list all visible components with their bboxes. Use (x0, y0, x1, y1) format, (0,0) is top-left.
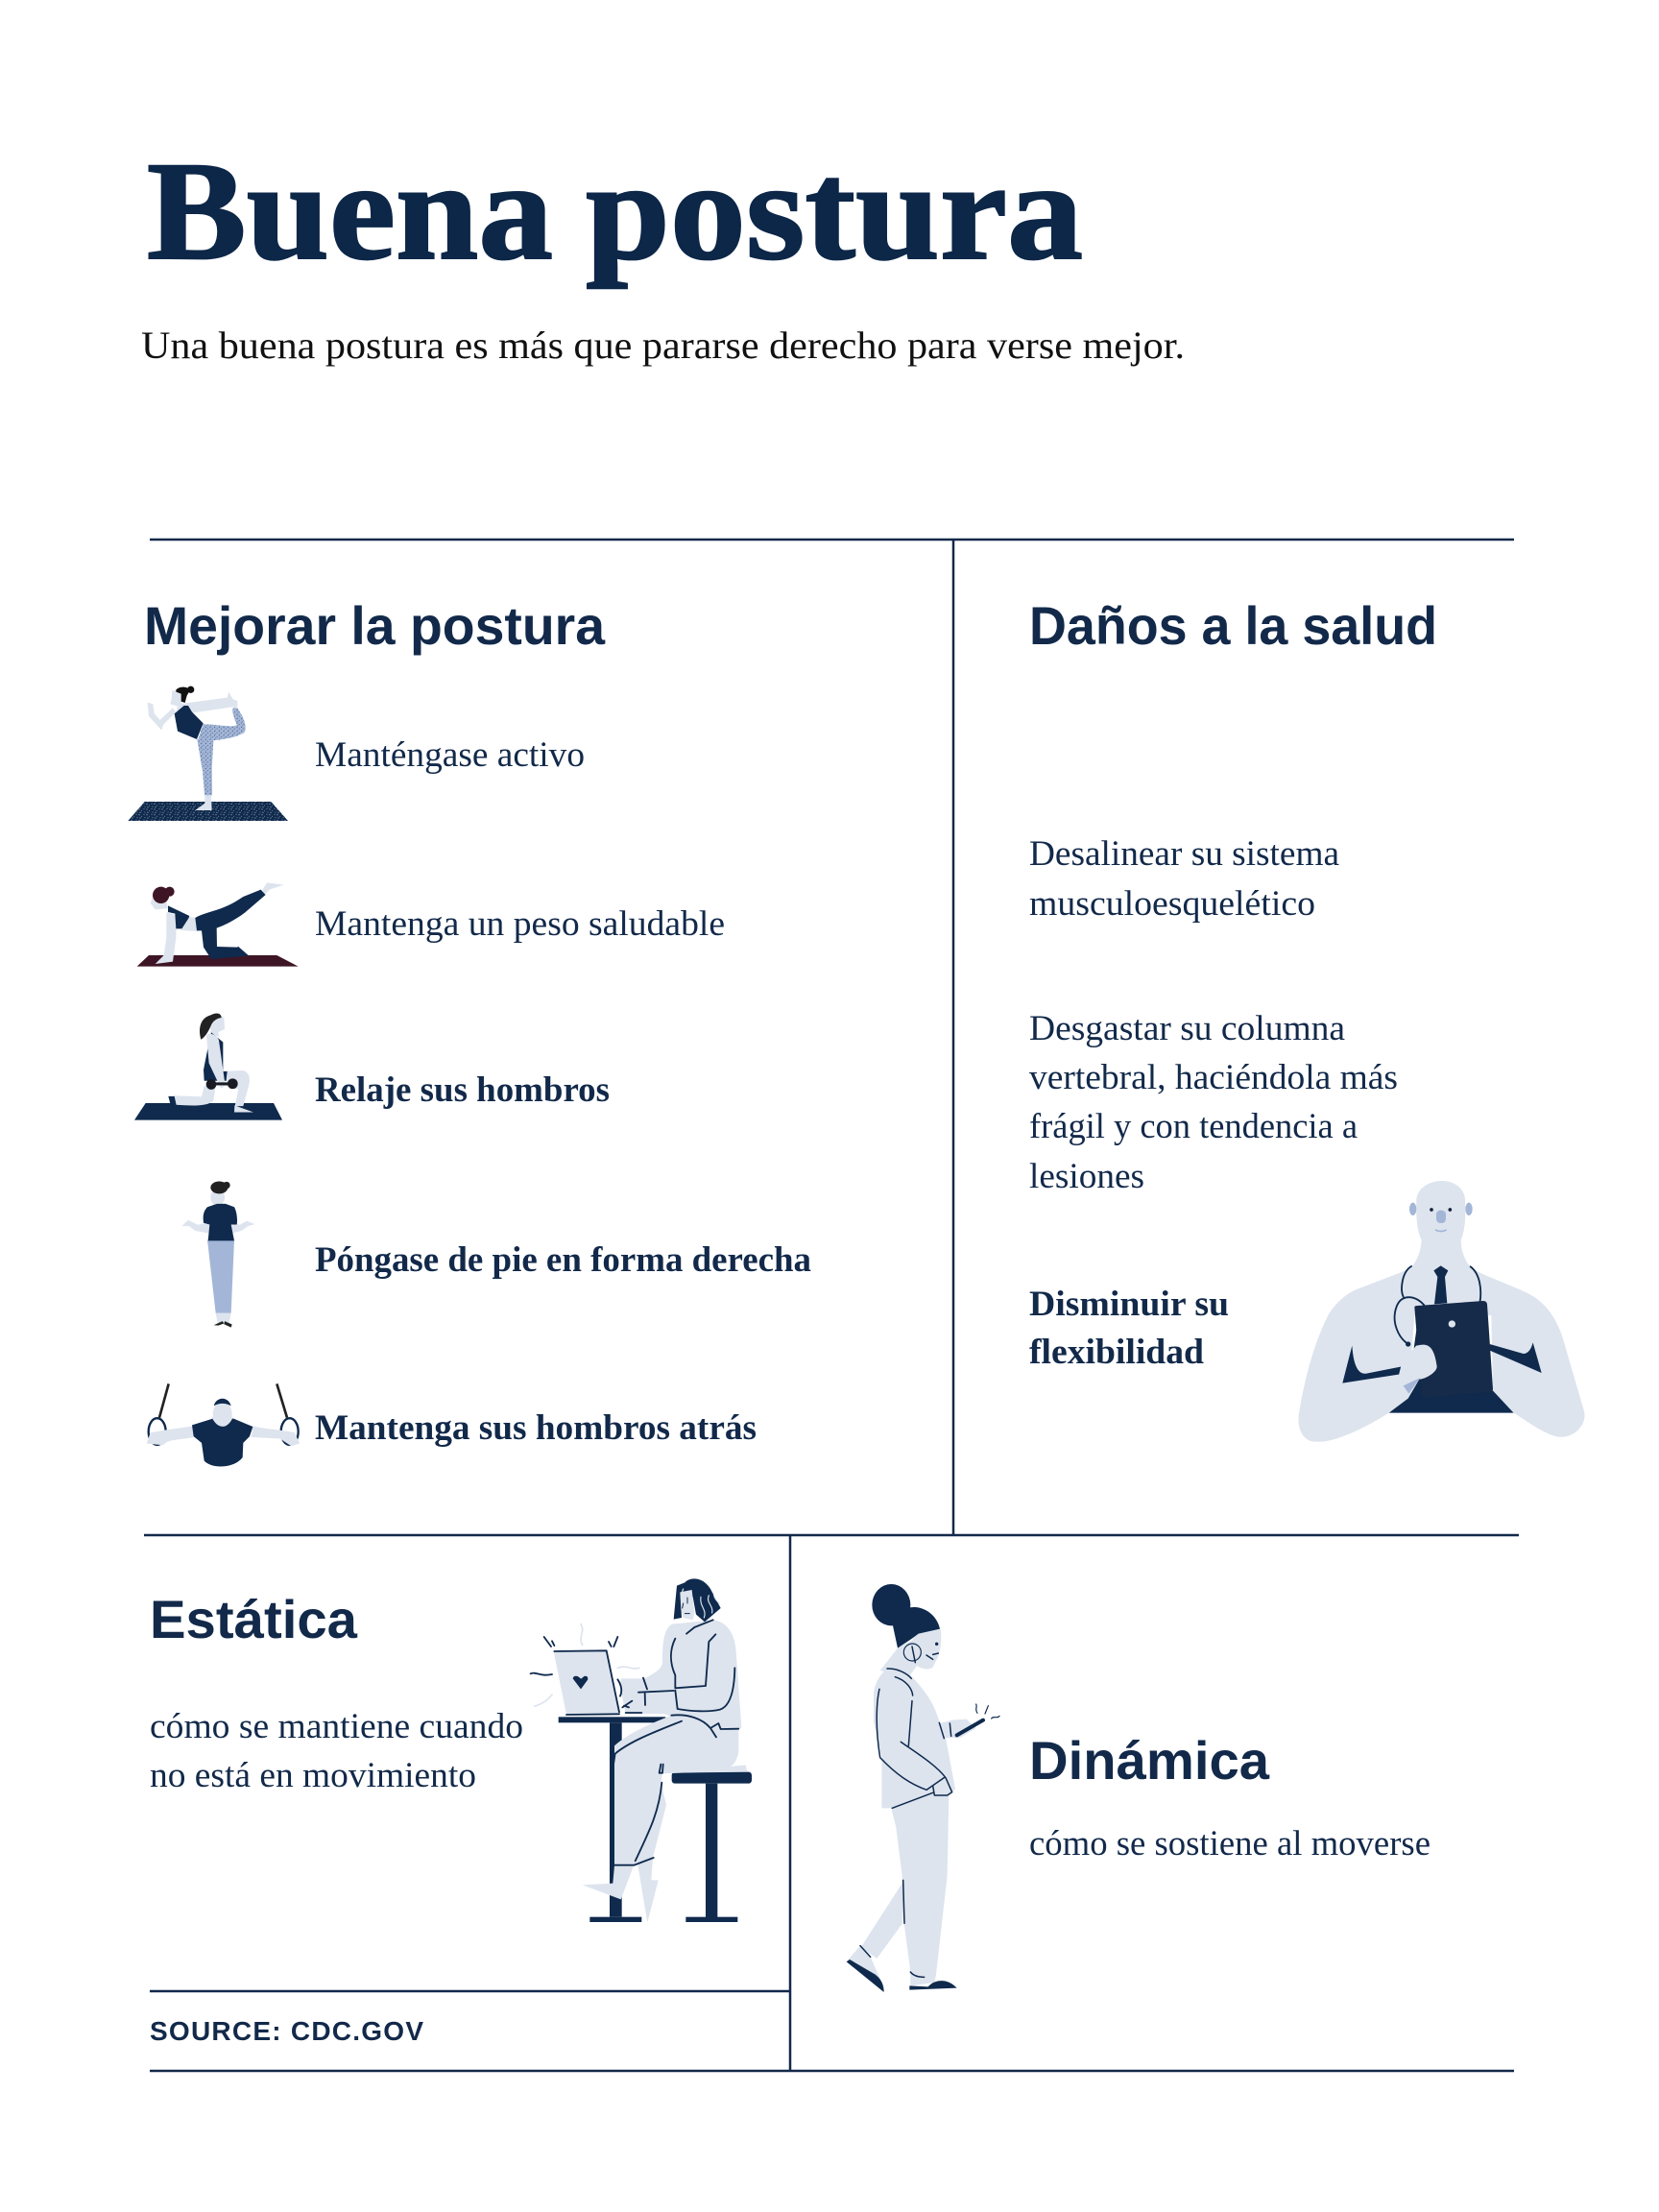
item: hombros atrás: Mantenga sus hombros atrás (315, 1408, 757, 1448)
text: disminuir: flexibilidad (1029, 1333, 1204, 1372)
text: desgastar: frágil y con tendencia a (1029, 1107, 1358, 1146)
text: estática description: cómo se mantiene cuando (150, 1707, 523, 1746)
text: dinámica description: cómo se sostiene al moverse (1029, 1824, 1431, 1863)
heading: daños a la salud: Daños a la salud (1029, 595, 1437, 656)
text: desalinear: musculoesquelético (1029, 884, 1315, 924)
source text: SOURCE: CDC.GOV (150, 2016, 423, 2046)
text: estática description: no está en movimiento (150, 1756, 476, 1795)
item: peso saludable: Mantenga un peso saludable (315, 904, 725, 944)
text: disminuir: Disminuir su (1029, 1285, 1229, 1324)
icon: yoga standing pose (128, 686, 288, 821)
text: desgastar: Desgastar su columna (1029, 1009, 1345, 1048)
text: desgastar: vertebral, haciéndola más (1029, 1058, 1398, 1097)
item: de pie: Póngase de pie en forma derecha (315, 1240, 811, 1280)
icon: table pose (137, 882, 299, 967)
subtitle: Una buena postura es más que pararse derecho para verse mejor. (141, 324, 1185, 367)
panel: mejorar la postura (128, 595, 811, 1466)
icon: doctor with tablet (1298, 1181, 1585, 1442)
text: desalinear: Desalinear su sistema (1029, 834, 1339, 874)
heading: dinámica: Dinámica (1029, 1730, 1270, 1791)
item: manténgase activo: Manténgase activo (315, 735, 585, 775)
item: relaje sus hombros: Relaje sus hombros (315, 1070, 610, 1110)
icon: standing woman (181, 1181, 255, 1328)
icon: woman at laptop on stool (531, 1578, 752, 1923)
panel: dinámica (847, 1584, 1431, 1992)
panel: estática (150, 1578, 752, 1923)
icon: lunge with dumbbells (134, 1013, 282, 1120)
title: Buena (147, 132, 553, 289)
icon: walking woman with phone (847, 1584, 999, 1992)
icon: man on rings (147, 1383, 300, 1466)
heading: estática: Estática (150, 1589, 358, 1649)
panel: daños a la salud (1029, 595, 1585, 1442)
title: postura (586, 132, 1083, 289)
heading: mejorar la postura: Mejorar la postura (144, 595, 606, 656)
text: desgastar: lesiones (1029, 1157, 1144, 1196)
